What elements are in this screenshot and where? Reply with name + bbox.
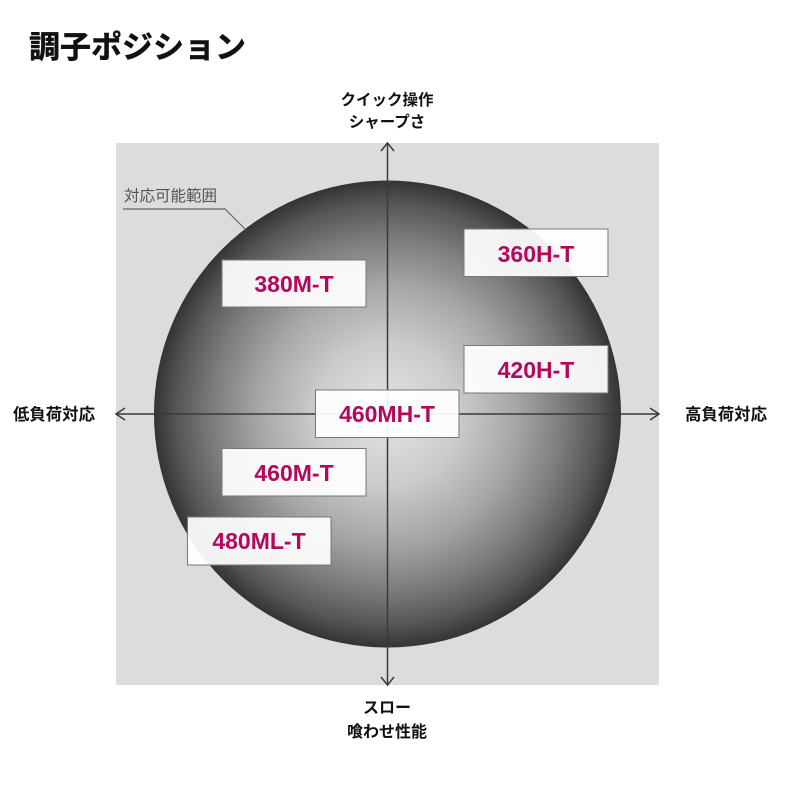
axis label: top: シャープさ [349,113,425,131]
panel: background square [116,143,659,685]
label box: 460M-T: 460M-T [254,460,334,486]
callout: supported range label [123,187,246,230]
axis label: left: 低負荷対応 [13,405,96,424]
horizontal axis arrow [116,408,659,420]
label box: 360H-T: 360H-T [498,241,574,267]
label box: 480ML-T [188,517,331,565]
callout: supported range label: 対応可能範囲 [124,187,217,205]
vertical axis arrow [381,143,394,685]
label box: 460MH-T: 460MH-T [339,401,435,427]
label box: 460MH-T [316,390,459,438]
label box: 360H-T [464,229,608,276]
circle: supported range [154,180,621,648]
title: 調子ポジション [29,30,246,65]
label box: 480ML-T: 480ML-T [212,528,306,554]
axis label: top: クイック操作 [340,91,434,109]
label box: 420H-T: 420H-T [498,357,574,383]
label box: 380M-T [222,260,366,307]
axis label: bottom: スロー [363,700,411,717]
label box: 380M-T: 380M-T [254,271,334,297]
axis label: bottom: 喰わせ性能 [347,722,427,741]
label box: 460M-T [222,448,366,496]
axis label: right: 高負荷対応 [685,405,768,424]
label box: 420H-T [464,346,608,393]
